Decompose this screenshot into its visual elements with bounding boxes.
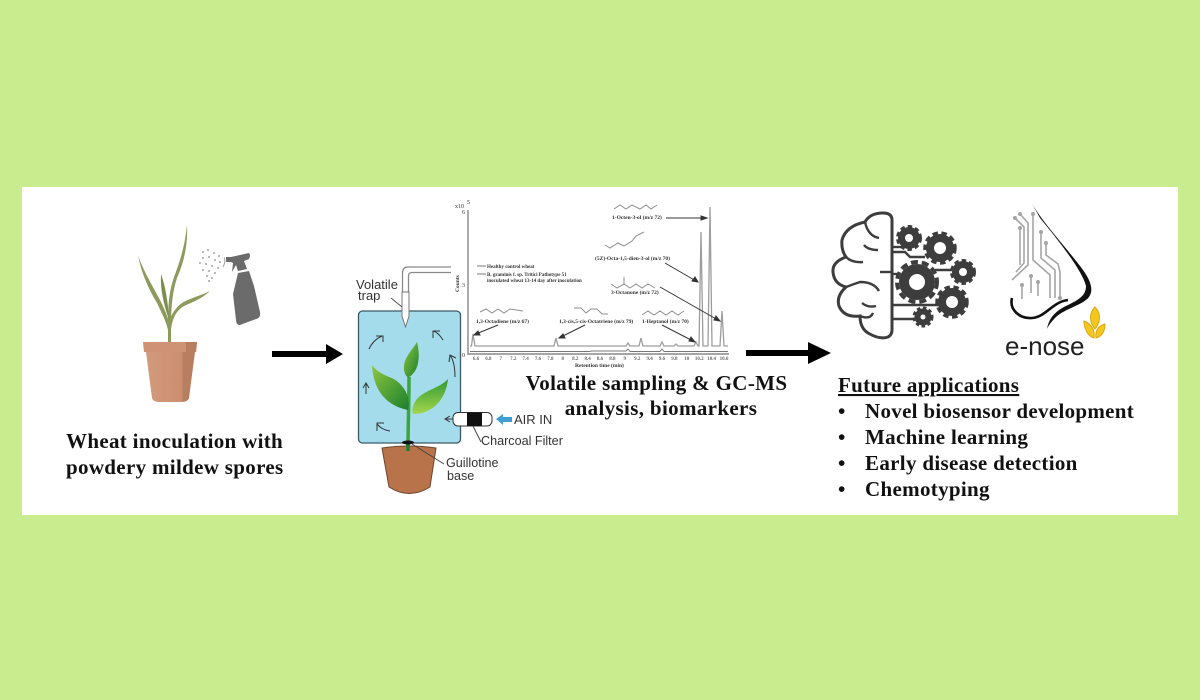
x-axis ticks: 8.6	[597, 357, 604, 362]
x-axis ticks: 6.8	[485, 357, 492, 362]
heading: wheat inoculation: Wheat inoculation with	[66, 429, 283, 453]
arrow: inoculation to sampling	[272, 344, 343, 364]
text block: future applications: •	[838, 399, 846, 423]
chart: GC-MS chromatogram: inoculated wheat 13-14 day after inoculation	[487, 279, 582, 284]
charcoal filter	[453, 412, 492, 426]
white panel	[22, 187, 1178, 515]
label: guillotine base: Guillotine	[446, 456, 499, 470]
x-axis ticks: 7.6	[535, 357, 542, 362]
x-axis ticks	[473, 357, 729, 362]
callout arrows	[474, 216, 720, 342]
icon: brain with gears	[833, 213, 974, 338]
chart: GC-MS chromatogram: Healthy control wheat	[487, 265, 535, 270]
chart: GC-MS chromatogram: B. graminis f. sp. Tritici Pathotype 51	[487, 273, 567, 278]
text block: future applications: •	[838, 477, 846, 501]
text block: future applications: Machine learning	[865, 425, 1028, 449]
text block: future applications	[838, 373, 1134, 501]
x-axis ticks: 7.4	[522, 357, 529, 362]
icon: e-nose	[1005, 200, 1105, 361]
trace	[470, 207, 728, 346]
x-axis ticks: 6.6	[473, 357, 480, 362]
chart: GC-MS chromatogram: 1,3-cis,5-cis-Octatriene (m/z 79)	[559, 318, 633, 325]
chart: GC-MS chromatogram: 3-Octanone (m/z 72)	[611, 289, 659, 296]
x-axis ticks: 8.8	[609, 357, 616, 362]
heading: wheat inoculation: powdery mildew spores	[66, 455, 284, 479]
chart: GC-MS chromatogram: (5Z)-Octa-1,5-dien-3-ol (m/z 70)	[595, 255, 670, 262]
x-axis ticks: 7.8	[547, 357, 554, 362]
x-axis ticks: 7	[500, 357, 503, 362]
tube	[402, 267, 451, 294]
label: guillotine base: base	[447, 469, 474, 483]
chart: GC-MS chromatogram: 5	[467, 200, 470, 206]
x-axis ticks: 10	[684, 357, 690, 362]
structures	[480, 205, 684, 315]
volatile trap	[402, 292, 409, 327]
text block: future applications: Future applications	[838, 373, 1019, 397]
panel: volatile sampling chamber	[356, 267, 563, 494]
x-axis ticks: 10.6	[720, 357, 729, 362]
x-axis ticks: 10.2	[695, 357, 704, 362]
chamber	[358, 311, 460, 443]
text block: future applications: Chemotyping	[865, 477, 990, 501]
label: charcoal filter: Charcoal Filter	[481, 434, 563, 448]
x-axis ticks: 8.4	[584, 357, 591, 362]
chart: GC-MS chromatogram	[455, 200, 729, 369]
icon: wheat plant in pot	[138, 225, 210, 402]
guillotine base	[402, 440, 414, 444]
chart: GC-MS chromatogram: 0	[462, 353, 465, 359]
peak labels: 1,3-Octadiene (m/z 67)	[476, 318, 529, 325]
label: e-nose: e-nose	[1005, 331, 1084, 361]
text block: future applications: Novel biosensor development	[865, 399, 1134, 423]
legend	[477, 266, 486, 274]
air flow arrows	[363, 331, 456, 431]
chart: GC-MS chromatogram: Retention time (min)	[575, 362, 624, 369]
x-axis ticks: 9.6	[659, 357, 666, 362]
chart: GC-MS chromatogram: 1-Octen-3-ol (m/z 72)	[612, 214, 662, 221]
arrow: sampling to applications	[746, 342, 831, 364]
x-axis ticks: 7.2	[510, 357, 517, 362]
air in arrow	[496, 414, 512, 425]
text block: future applications: •	[838, 425, 846, 449]
x-axis ticks: 8	[562, 357, 565, 362]
chart: GC-MS chromatogram: 6	[462, 210, 465, 216]
icon: spray bottle	[199, 249, 260, 325]
label: air in: AIR IN	[514, 412, 552, 427]
x-axis ticks: 8.2	[572, 357, 579, 362]
chart: GC-MS chromatogram: Counts	[455, 275, 461, 292]
x-axis ticks: 9.4	[646, 357, 653, 362]
text block: future applications: Early disease detection	[865, 451, 1078, 475]
heading: volatile sampling: analysis, biomarkers	[565, 396, 757, 420]
plant	[408, 377, 409, 450]
x-axis ticks: 9.8	[671, 357, 678, 362]
chart: GC-MS chromatogram: 1-Heptanol (m/z 70)	[642, 318, 689, 325]
chart: GC-MS chromatogram: 3	[462, 283, 465, 289]
pot	[382, 446, 436, 494]
x-axis ticks: 9.2	[634, 357, 641, 362]
x-axis ticks: 9	[624, 357, 627, 362]
text block: future applications: •	[838, 451, 846, 475]
label: volatile trap: trap	[358, 288, 380, 303]
y-axis labels: x10	[455, 204, 464, 210]
x-axis ticks: 10.4	[707, 357, 716, 362]
heading: volatile sampling: Volatile sampling & GC-MS	[526, 371, 787, 395]
wheat icon	[1084, 307, 1105, 338]
label: volatile trap: Volatile	[356, 277, 398, 292]
